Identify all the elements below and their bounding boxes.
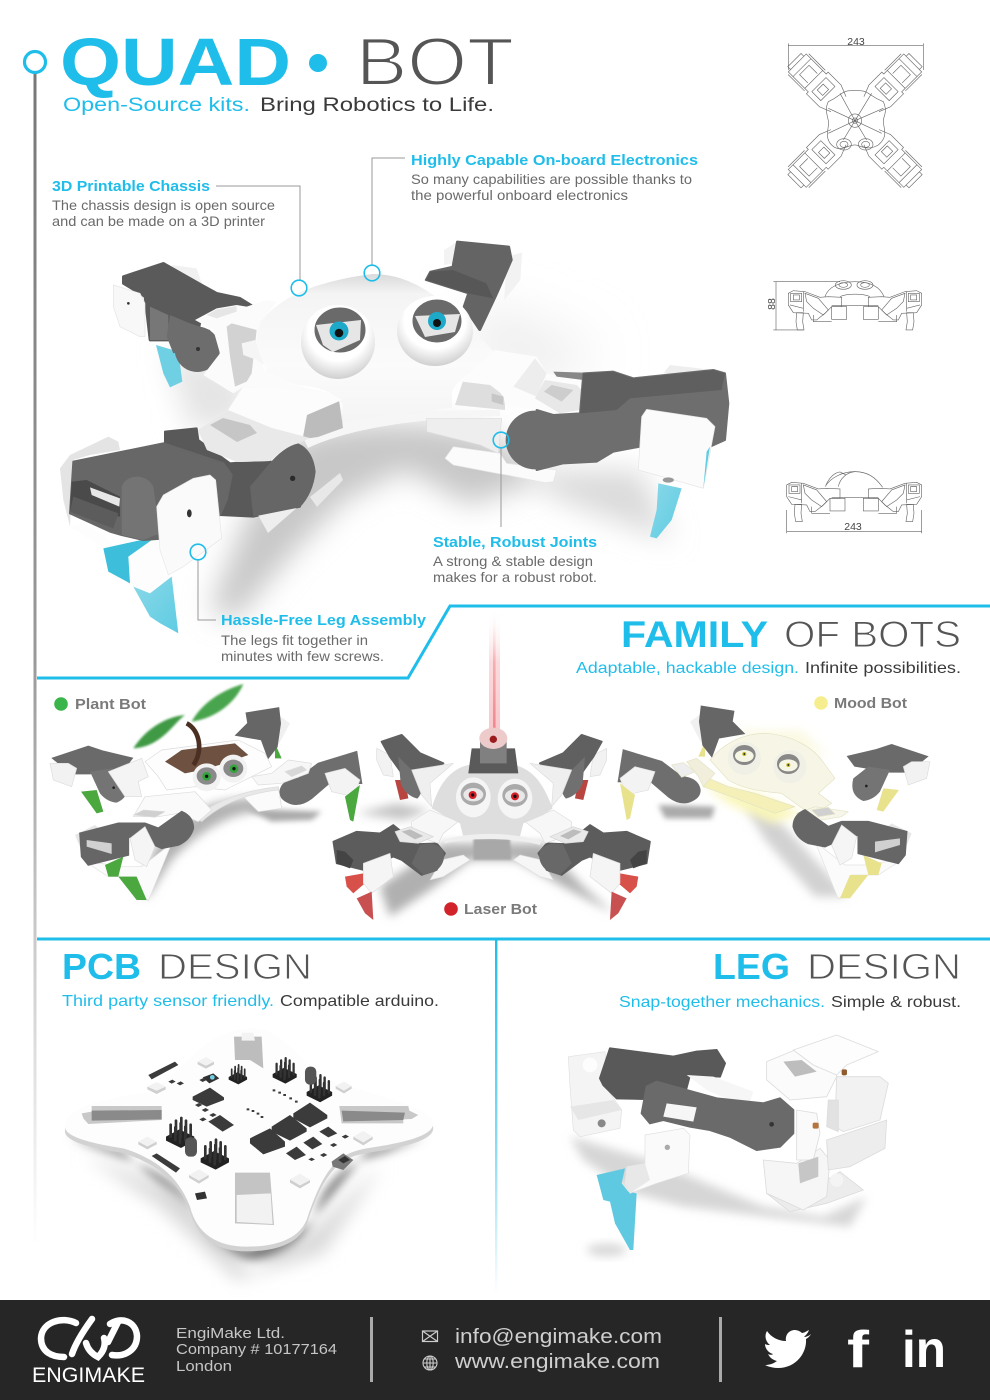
laser bot label: Laser Bot [464,902,537,918]
panel: family of bots heading [37,606,990,678]
PCB board [65,1028,433,1247]
company details: EngiMake Ltd. [176,1325,285,1342]
family subtitle: Adaptable, hackable design. [576,660,799,677]
laser beam [489,612,500,740]
lower servo arm [642,1082,793,1150]
chassis text: and can be made on a 3D printer [52,213,265,229]
front left disc and plate [157,443,316,575]
title word QUAD: QUAD [60,25,291,100]
mood bot label: Mood Bot [834,696,907,712]
chassis text: The chassis design is open source [52,197,275,213]
family panel frame line [37,606,990,678]
blueprint drawings [773,43,926,533]
main robot render [60,242,728,633]
blueprint dimension labels: 243 [847,36,865,48]
logo wordmark: ENGIMAKE [32,1364,145,1387]
blueprint dimension labels: 88 [766,298,778,310]
laser bot body [432,765,553,845]
callout: leg assembly [190,544,427,664]
chassis leader line and ring [216,186,307,296]
blueprint: top view [784,43,926,192]
joint details [783,1060,847,1187]
PCB USB and sensor [195,1073,353,1200]
upper servo arm [600,1048,725,1100]
family subtitle: Infinite possibilities. [805,660,961,677]
leg subtitle: Snap-together mechanics. [619,994,825,1011]
left eye [301,305,375,379]
leg heading: LEG [713,946,790,987]
rear left leg and bracket [113,263,330,393]
plant bot [50,684,362,901]
plant bot soil [165,743,248,773]
family bot labels [54,696,907,918]
family shadows [138,798,848,917]
mood bot glow [705,785,802,823]
electronics text: the powerful onboard electronics [411,187,628,203]
electronics heading: Highly Capable On-board Electronics [411,152,698,169]
callout: on-board electronics [364,152,698,281]
subtitle: Open-Source kits. [63,95,250,116]
blueprint: front view [787,472,922,533]
family bots render [50,684,930,920]
leg shadow [570,1137,867,1256]
callout: stable joints [433,432,597,585]
leg text: The legs fit together in [221,632,368,648]
electronics leader line and ring [364,158,405,281]
family heading: OF BOTS [784,614,961,655]
leg text: minutes with few screws. [221,648,384,664]
footer separators [372,1317,720,1382]
logo [32,1319,145,1387]
front left arm bracket [198,387,343,533]
plant bot label: Plant Bot [75,697,146,713]
laser bot left legs [333,735,470,920]
footer background [0,1300,990,1400]
email: info@engimake.com [455,1326,662,1348]
joints text: makes for a robust robot. [433,569,597,585]
mood bot eyes [728,742,807,783]
company details: London [176,1358,232,1375]
robot eyes [301,296,473,379]
PCB heading: DESIGN [158,946,312,987]
icon: facebook: f [847,1321,870,1379]
white wedge [687,1075,753,1103]
blueprint dimension labels [766,36,865,533]
leg leader line and ring [190,544,216,620]
icon: envelope [422,1331,438,1342]
icon: globe [423,1356,437,1370]
under-body rim [303,410,500,448]
title ring marker [24,52,46,72]
PCB render [65,1028,433,1280]
PCB square pads [138,1057,373,1188]
blue foot [597,1168,637,1250]
PCB subtitle: Compatible arduino. [280,993,439,1010]
joints leader line and ring [493,432,509,527]
electronics text: So many capabilities are possible thanks to [411,171,692,187]
website: www.engimake.com [454,1351,660,1373]
joint blocks [763,1035,888,1212]
subtitle: Bring Robotics to Life. [260,95,494,116]
PCB subtitle: Third party sensor friendly. [62,993,274,1010]
robot shadows [165,300,672,620]
robot body dome [257,274,495,427]
vertical timeline rule [34,72,36,1247]
logo mark [41,1319,137,1357]
family heading: FAMILY [621,614,768,655]
right arm and leg [427,350,728,538]
plant bot label [54,697,146,713]
title dot [309,54,327,72]
leg heading: Hassle-Free Leg Assembly [221,612,427,629]
laser emitter [468,728,518,773]
blueprint dimension labels: 243 [844,521,862,533]
callout: 3D printable chassis [52,178,307,296]
front left leg [60,428,300,633]
PCB heading: PCB [62,946,141,987]
PCB shadow [70,1137,427,1280]
icon: twitter [765,1330,811,1368]
laser bot under-body [473,838,512,860]
PCB capacitors [185,1067,316,1157]
right eye [397,296,473,366]
PCB slots [82,1033,418,1225]
chassis heading: 3D Printable Chassis [52,178,210,195]
leg subtitle: Simple & robust. [831,994,961,1011]
laser bot eyes [456,777,532,819]
leg bracket plate [568,1052,622,1137]
panel: leg design [568,946,961,1256]
plant bot eyes [193,755,247,791]
PCB board edge [65,1033,433,1251]
mood bot body [672,733,848,823]
foot plate [625,1128,690,1193]
PCB header pins [166,1058,332,1170]
plant bot stem and leaves [133,684,243,765]
PCB chips [148,1062,349,1173]
panel: PCB design [62,946,439,1280]
plant bot body [108,740,312,822]
joints heading: Stable, Robust Joints [433,534,597,551]
title [24,24,514,116]
title word BOT: BOT [356,24,514,100]
footer [0,1300,990,1400]
joints text: A strong & stable design [433,553,593,569]
icon: linkedin: in [902,1321,946,1379]
mood bot [618,707,930,899]
laser bot [333,728,650,920]
leg heading: DESIGN [807,946,961,987]
leg render [568,1035,888,1256]
section divider lines [37,938,990,940]
rear right leg [426,242,522,330]
company details: Company # 10177164 [176,1341,337,1358]
blueprint: side view [773,281,922,330]
